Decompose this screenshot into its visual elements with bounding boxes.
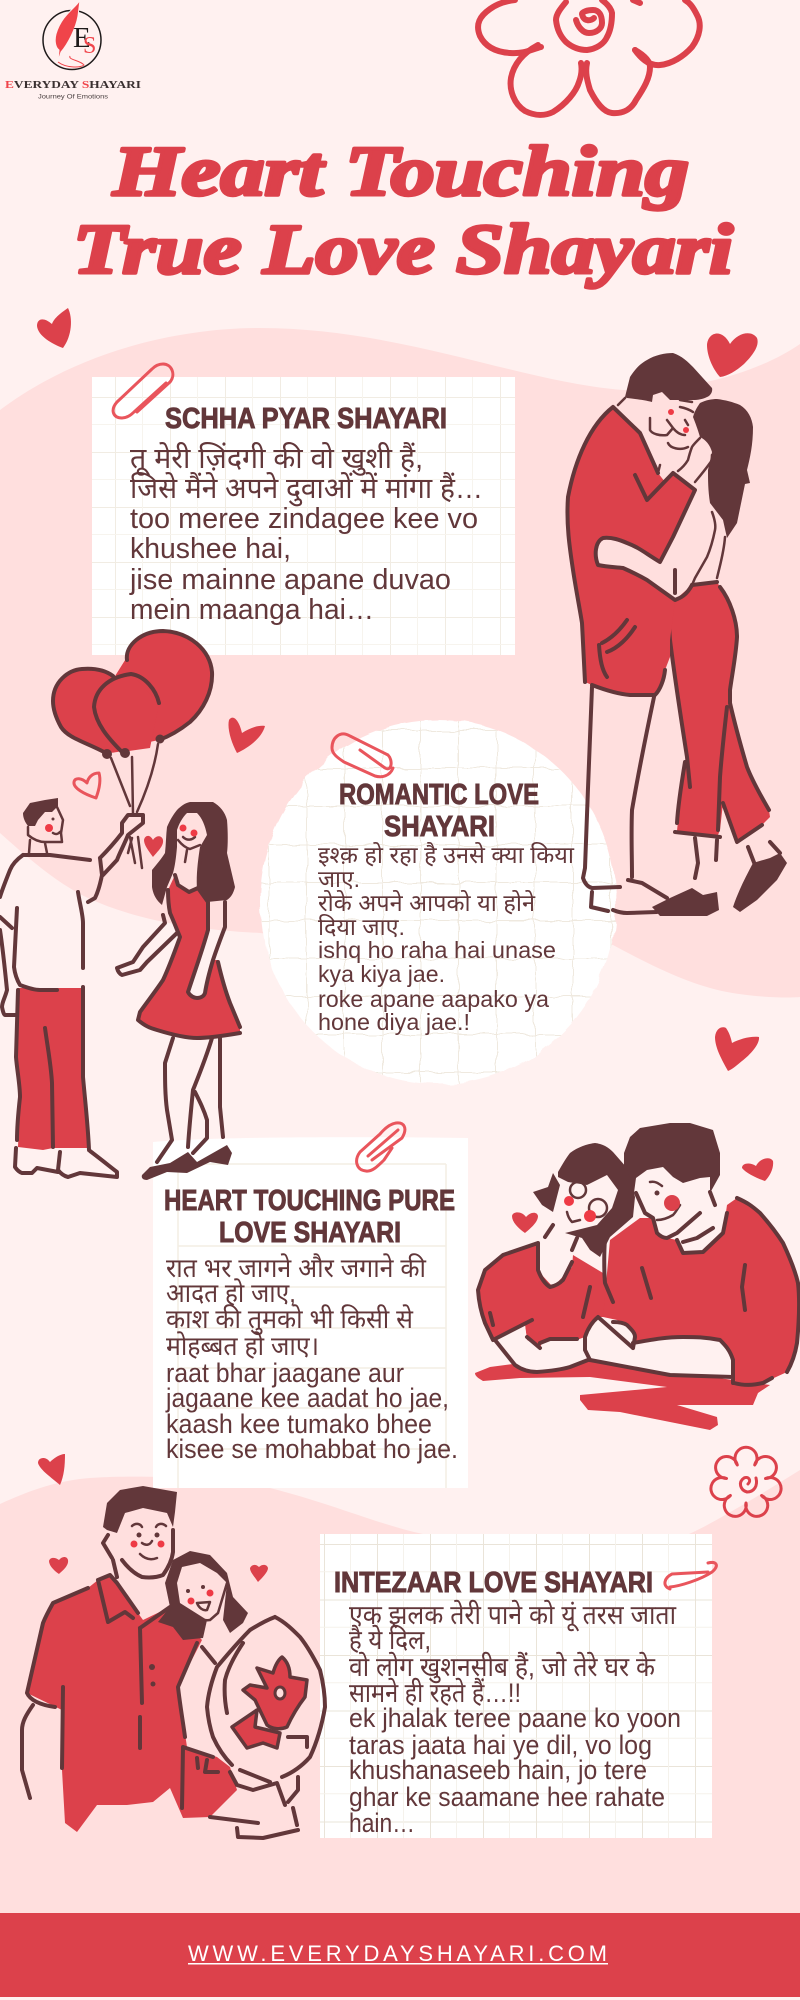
- panel: Romantic Love Shayari: [260, 720, 616, 1084]
- woman shoes: [142, 1145, 232, 1180]
- bouquet wrap outline: [207, 1617, 325, 1777]
- illustration: couple with bouquet: [22, 1486, 325, 1838]
- red ground smear: [475, 1360, 770, 1430]
- poem text: hone diya jae.!: [318, 1009, 470, 1035]
- man arm around woman: [596, 538, 675, 600]
- poem text: सामने ही रहते हैं…!!: [349, 1677, 521, 1708]
- poem text: taras jaata hai ye dil, vo log: [349, 1730, 652, 1760]
- title line 2: True Love Shayari: [73, 211, 733, 289]
- woman jaw and shoulder: [658, 438, 712, 482]
- bouquet of strings in hand: [128, 837, 142, 868]
- poem text: रात भर जागने और जगाने की: [166, 1253, 427, 1283]
- panel: Heart Touching Pure Love Shayari: LOVE SHAYARI: [219, 1217, 401, 1249]
- poem text: तू मेरी ज़िंदगी की वो खुशी हैं,: [130, 442, 423, 476]
- woman shoe: [733, 853, 787, 912]
- heart left: [49, 1557, 68, 1574]
- logo: monogram E: E: [73, 22, 91, 54]
- card paper: [320, 1534, 712, 1838]
- decorative large flower: [478, 0, 700, 115]
- woman body outline: [178, 1643, 218, 1808]
- poem text: मोहब्बत हो जाए।: [166, 1331, 319, 1361]
- footer website url: WWW.EVERYDAYSHAYARI.COM: [188, 1941, 607, 1966]
- title: [73, 133, 733, 289]
- illustration: sitting couple: [475, 1123, 799, 1430]
- poem text: ek jhalak teree paane ko yoon: [349, 1703, 681, 1733]
- poem text: raat bhar jaagane aur: [166, 1358, 404, 1388]
- heart right: [742, 1158, 773, 1181]
- woman trousers: [668, 582, 770, 842]
- heading: INTEZAAR LOVE SHAYARI: [334, 1567, 653, 1599]
- title line 1: Heart Touching: [112, 133, 689, 211]
- panel: Heart Touching Pure Love Shayari: [153, 1123, 468, 1488]
- woman hair: [558, 1143, 635, 1257]
- icon: outline heart: [74, 773, 100, 798]
- heading: SCHHA PYAR SHAYARI: [165, 403, 447, 435]
- man shoes: [15, 1148, 117, 1177]
- shirt outlines: [567, 407, 695, 695]
- poem text: [129, 442, 483, 626]
- dress: [138, 875, 240, 1038]
- icon: small flower outline: [711, 1447, 781, 1516]
- heading: ROMANTIC LOVE: [339, 779, 539, 811]
- icon: paper clip: [332, 734, 393, 777]
- poem text: [165, 1253, 458, 1464]
- illustration: couple embracing: [567, 333, 787, 916]
- woman cheeks and mouth: [564, 1196, 574, 1206]
- poem text: रोके अपने आपको या होने: [318, 889, 536, 916]
- man face: [636, 1192, 727, 1253]
- poem text: दिया जाए.: [318, 913, 405, 940]
- poem text: ishq ho raha hai unase: [318, 937, 556, 963]
- logo: oval ring: [43, 10, 101, 70]
- man head and face: [28, 807, 63, 853]
- woman hair: [152, 802, 235, 905]
- poem text: जिसे मैंने अपने दुवाओं में मांगा हैं…: [130, 472, 483, 507]
- heart: [707, 333, 758, 377]
- icon: scribble heart middle: [228, 718, 265, 753]
- icon: small red heart: [144, 836, 163, 857]
- logo: ink swirl: [58, 56, 84, 67]
- poem text: mein maanga hai…: [130, 594, 374, 626]
- clasped hands: [585, 1317, 635, 1360]
- logo: monogram S: S: [83, 33, 96, 59]
- woman sweater: [478, 1242, 610, 1348]
- heading: HEART TOUCHING PURE: [164, 1185, 455, 1217]
- trouser outlines: [668, 582, 769, 842]
- poem text: too meree zindagee kee vo: [130, 503, 478, 535]
- logo: tagline: Journey Of Emotions: [38, 94, 109, 100]
- poem text: एक झलक तेरी पाने को यूं तरस जाता: [349, 1599, 677, 1632]
- icon: scribble heart lower left: [38, 1454, 65, 1485]
- logo: [5, 0, 141, 100]
- man hair: [624, 1123, 720, 1200]
- balloon knots: [102, 749, 112, 759]
- woman hair: [158, 1551, 248, 1640]
- heart right: [250, 1565, 268, 1582]
- centre balloon: [94, 674, 159, 752]
- poem text: जाए.: [318, 866, 360, 892]
- poem text: आदत हो जाए,: [166, 1278, 296, 1308]
- poem text: kya kiya jae.: [318, 961, 445, 987]
- man shirt outline and arm: [0, 815, 143, 1015]
- pocket: [599, 620, 635, 677]
- panel: Intezaar Love Shayari: [320, 1534, 716, 1838]
- poem text: jagaane kee aadat ho jae,: [165, 1383, 449, 1413]
- poem text: kaash kee tumako bhee: [166, 1409, 432, 1439]
- poem text: ghar ke saamane hee rahate: [349, 1782, 665, 1812]
- dress outlines: [138, 875, 240, 1038]
- woman legs: [157, 1037, 223, 1162]
- poem text: है ये दिल,: [349, 1624, 431, 1655]
- balloon outlines: [53, 631, 212, 752]
- logo: name: EVERYDAY SHAYARI: [5, 80, 141, 91]
- woman glasses: [570, 1182, 607, 1217]
- poem text: काश की तुमको भी किसी से: [166, 1304, 414, 1336]
- card paper: [92, 377, 515, 655]
- poem text: hain…: [349, 1808, 415, 1838]
- man shoe: [652, 888, 719, 916]
- man shirt and skirt: [27, 1575, 237, 1832]
- big balloon: [100, 631, 212, 746]
- poem text: kisee se mohabbat ho jae.: [166, 1434, 458, 1464]
- woman face: [188, 1598, 194, 1604]
- poem text: jise mainne apane duvao: [129, 564, 451, 596]
- poem text: khushanaseeb hain, jo tere: [349, 1755, 647, 1785]
- background wave: lower pink band: [0, 1470, 800, 1915]
- woman back: [692, 512, 725, 585]
- logo: feather quill: [55, 0, 80, 61]
- man pants outlines: [16, 987, 89, 1150]
- man outline details: [22, 1575, 170, 1798]
- left balloon: [53, 669, 125, 753]
- man hair: [625, 353, 712, 402]
- woman hair: [693, 399, 753, 538]
- man face: [130, 1540, 138, 1548]
- strings: [111, 744, 158, 814]
- round torn paper: [260, 720, 616, 1084]
- man shirt and shorts: [567, 407, 695, 695]
- poem text: roke apane aapako ya: [318, 986, 550, 1012]
- icon: paper clip: [113, 364, 173, 418]
- poem text: इश्क़ हो रहा है उनसे क्या किया: [318, 841, 575, 868]
- man head: [103, 1530, 173, 1577]
- panel: Romantic Love Shayari: SHAYARI: [384, 811, 495, 843]
- man legs: [583, 687, 667, 913]
- man hair: [103, 1486, 177, 1533]
- panel: Schha Pyar Shayari: [92, 364, 515, 655]
- icon: paper clip: [357, 1123, 405, 1171]
- woman face: [178, 837, 201, 864]
- poem text: [349, 1599, 681, 1838]
- icon: paper clip: [665, 1562, 716, 1589]
- poem text: [318, 841, 575, 1035]
- man pants: [17, 988, 90, 1150]
- poem text: वो लोग खुशनसीब हैं, जो तेरे घर के: [349, 1651, 656, 1684]
- illustration: balloons: [53, 631, 212, 814]
- man hair: [23, 798, 58, 826]
- poem text: khushee hai,: [130, 533, 291, 565]
- footer bar: [0, 1913, 800, 1997]
- card paper: [153, 1137, 468, 1488]
- woman left arm: [117, 915, 177, 975]
- illustration: boy giving balloons to girl: [0, 798, 240, 1180]
- background wave: upper pink band: [0, 328, 800, 997]
- pale arms and hands: [495, 1317, 733, 1377]
- woman legs: [695, 838, 780, 878]
- bouquet flower: [232, 1710, 280, 1748]
- heart left: [512, 1212, 538, 1233]
- icon: scribble heart top left: [37, 308, 71, 348]
- sweater outlines: [478, 1225, 745, 1372]
- man sweater: [603, 1198, 798, 1383]
- faces: [668, 409, 674, 415]
- icon: scribble heart right: [715, 1027, 759, 1071]
